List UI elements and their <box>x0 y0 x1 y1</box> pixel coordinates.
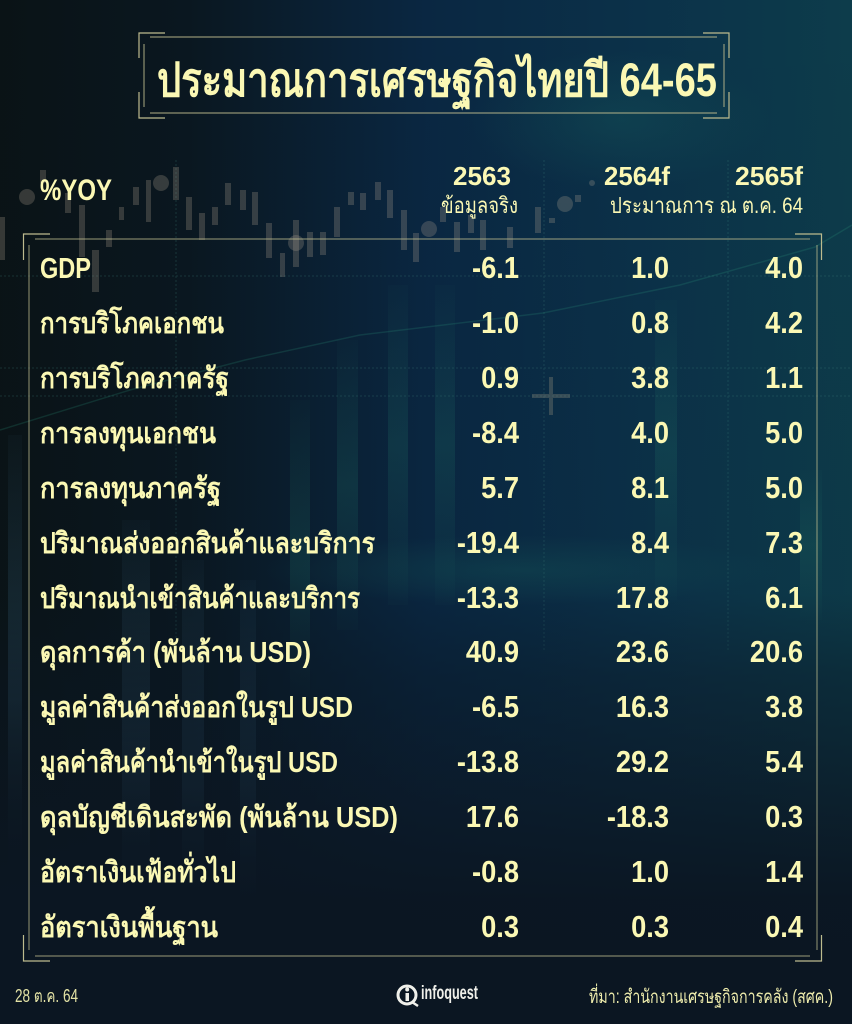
row: public consumption: 0.9 <box>481 361 519 395</box>
row: export volume: ปริมาณส่งออกสินค้าและบริการ <box>40 528 375 560</box>
row: trade balance: 23.6 <box>616 635 669 669</box>
row: private consumption: -1.0 <box>472 306 519 340</box>
row: trade balance: 40.9 <box>466 635 519 669</box>
infoquest logo: infoquest <box>421 983 478 1004</box>
row: export value <box>40 690 803 725</box>
table header <box>40 161 803 219</box>
row: core inflation: อัตราเงินพื้นฐาน <box>40 905 218 946</box>
row: private investment: -8.4 <box>472 416 520 450</box>
table frame <box>24 234 822 961</box>
table rows <box>40 251 804 946</box>
row: export value: มูลค่าสินค้าส่งออกในรูป USD <box>40 690 353 725</box>
row: export volume <box>40 526 803 560</box>
row: public investment <box>40 471 803 507</box>
row: import value: 29.2 <box>616 745 669 779</box>
row: public consumption <box>40 360 803 397</box>
row: current account: -18.3 <box>607 800 669 834</box>
row: headline inflation: 1.0 <box>631 855 669 889</box>
row: current account: ดุลบัญชีเดินสะพัด (พันล้าน USD) <box>40 802 398 835</box>
row: GDP: 1.0 <box>631 251 669 285</box>
row: public consumption: 1.1 <box>765 361 803 395</box>
row: export volume: 7.3 <box>765 526 803 560</box>
row: core inflation: 0.3 <box>631 910 669 944</box>
row: private investment: การลงทุนเอกชน <box>40 418 216 451</box>
row: private consumption: 4.2 <box>765 306 803 340</box>
row: import volume: -13.3 <box>457 581 519 615</box>
row: import volume: ปริมาณนำเข้าสินค้าและบริการ <box>40 583 360 615</box>
infoquest logo <box>398 983 478 1006</box>
row: GDP <box>40 251 803 285</box>
row: export value: 3.8 <box>765 690 803 724</box>
row: export volume: 8.4 <box>631 526 670 560</box>
row: private investment: 5.0 <box>765 416 803 450</box>
row: import volume: 6.1 <box>765 581 803 615</box>
title frame <box>139 33 729 118</box>
row: core inflation: 0.3 <box>481 910 519 944</box>
row: current account: 17.6 <box>466 800 519 834</box>
table header: ประมาณการ ณ ต.ค. 64 <box>610 193 803 218</box>
row: import volume <box>40 581 803 615</box>
row: GDP: GDP <box>40 253 91 285</box>
row: public consumption: 3.8 <box>631 361 669 395</box>
row: import value: -13.8 <box>457 745 519 779</box>
row: public consumption: การบริโภคภาครัฐ <box>40 360 229 397</box>
row: private consumption: 0.8 <box>631 306 669 340</box>
row: public investment: 5.7 <box>481 471 519 505</box>
table header: 2563 <box>453 161 511 191</box>
row: public investment: 5.0 <box>765 471 803 505</box>
table header: 2565f <box>735 161 803 191</box>
row: current account: 0.3 <box>765 800 803 834</box>
row: GDP: -6.1 <box>472 251 519 285</box>
row: headline inflation: -0.8 <box>472 855 519 889</box>
row: core inflation <box>40 905 804 946</box>
title: ประมาณการเศรษฐกิจไทยปี 64-65 <box>157 52 717 111</box>
crosshair <box>532 377 570 415</box>
row: private investment: 4.0 <box>631 416 669 450</box>
table header: ข้อมูลจริง <box>441 193 518 219</box>
date: 28 ต.ค. 64 <box>15 986 78 1006</box>
table header: 2564f <box>604 161 670 191</box>
table header: %YOY <box>40 174 112 207</box>
row: private investment <box>40 416 803 451</box>
row: GDP: 4.0 <box>765 251 803 285</box>
row: headline inflation: 1.4 <box>765 855 804 889</box>
row: private consumption <box>40 305 803 340</box>
row: import value <box>40 745 804 780</box>
row: import volume: 17.8 <box>616 581 669 615</box>
row: export value: 16.3 <box>616 690 669 724</box>
row: private consumption: การบริโภคเอกชน <box>40 305 224 340</box>
row: core inflation: 0.4 <box>765 910 804 944</box>
row: headline inflation <box>40 851 804 889</box>
row: trade balance: 20.6 <box>750 635 803 669</box>
row: import value: 5.4 <box>765 745 804 779</box>
row: import value: มูลค่าสินค้านำเข้าในรูป USD <box>40 745 338 780</box>
row: headline inflation: อัตราเงินเฟ้อทั่วไป <box>40 851 236 889</box>
row: public investment: การลงทุนภาครัฐ <box>40 473 221 507</box>
row: export value: -6.5 <box>472 690 519 724</box>
row: current account <box>40 800 803 835</box>
row: trade balance <box>40 635 803 670</box>
row: public investment: 8.1 <box>631 471 669 505</box>
row: trade balance: ดุลการค้า (พันล้าน USD) <box>40 637 311 670</box>
row: export volume: -19.4 <box>457 526 520 560</box>
